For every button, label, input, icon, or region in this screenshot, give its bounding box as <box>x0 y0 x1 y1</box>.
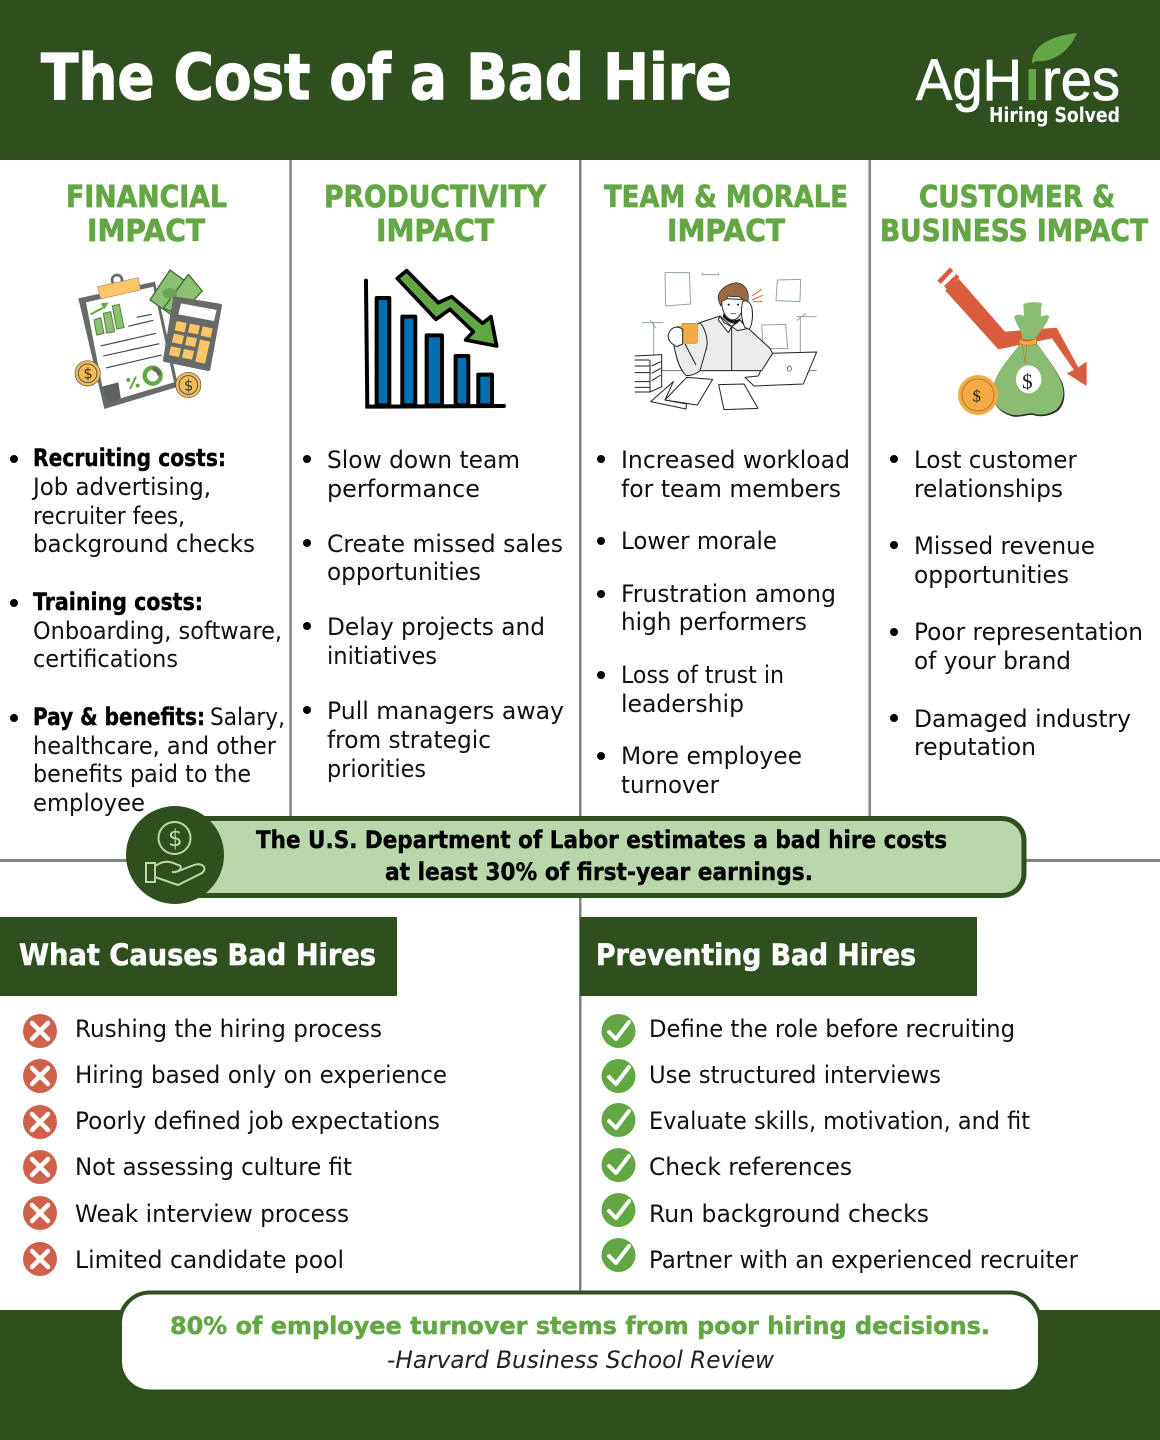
callout: turnover statistic: -Harvard Business School Review <box>387 1346 774 1374</box>
panel: productivity impact <box>303 180 564 783</box>
list: team and morale impact <box>597 446 850 799</box>
icon: hand holding dollar coin <box>126 806 224 904</box>
list: financial impact: certifications <box>33 645 178 673</box>
heading: financial impact: IMPACT <box>87 214 205 249</box>
icons: red cross marks <box>23 1014 57 1276</box>
heading: customer and business impact <box>880 180 1148 249</box>
list: productivity impact: Slow down team <box>327 446 520 474</box>
icon: money bag and falling arrow: $ <box>973 387 981 406</box>
list: causes: Limited candidate pool <box>75 1246 344 1274</box>
list: causes: Hiring based only on experience <box>75 1061 447 1089</box>
icon: clipboard, calculator and money: $ <box>184 377 193 394</box>
list: financial impact: recruiter fees, <box>33 502 185 530</box>
panel: financial impact <box>10 180 285 817</box>
callout: Department of Labor estimate: at least 30% of first-year earnings. <box>385 858 813 886</box>
logo: AgHires: AgH <box>916 48 1022 113</box>
list: customer and business impact: reputation <box>914 733 1036 761</box>
list: productivity impact: Create missed sales <box>327 530 563 558</box>
list: customer and business impact <box>890 446 1143 761</box>
list: team and morale impact: Lower morale <box>621 527 777 555</box>
heading: productivity impact <box>324 180 547 249</box>
footer band <box>0 1310 1160 1440</box>
list: financial impact: employee <box>33 789 145 817</box>
icon: stressed employee at desk <box>635 273 817 410</box>
list: financial impact <box>10 444 285 817</box>
icon: declining bar chart <box>366 271 504 407</box>
list: financial impact: healthcare, and other <box>33 732 276 760</box>
callout: turnover statistic <box>120 1292 1040 1392</box>
list: productivity impact: performance <box>327 475 480 503</box>
list: team and morale impact: leadership <box>621 690 744 718</box>
list: financial impact: benefits paid to the <box>33 760 251 788</box>
logo: AgHires: res <box>1042 48 1120 113</box>
list: prevention: Use structured interviews <box>649 1061 941 1089</box>
list: productivity impact: opportunities <box>327 558 481 586</box>
list: team and morale impact: Loss of trust in <box>621 661 784 689</box>
list: financial impact: Job advertising, <box>31 473 211 501</box>
callout: Department of Labor estimate <box>126 806 1024 904</box>
list: financial impact: background checks <box>33 530 255 558</box>
list: prevention: Partner with an experienced recruiter <box>649 1246 1078 1274</box>
list: customer and business impact: Missed revenue <box>914 532 1095 560</box>
icon: clipboard, calculator and money <box>75 270 220 409</box>
list: customer and business impact: Damaged industry <box>914 705 1131 733</box>
list: team and morale impact: high performers <box>621 608 807 636</box>
list: prevention: Evaluate skills, motivation, and fit <box>649 1107 1030 1135</box>
heading: customer and business impact: CUSTOMER & <box>919 180 1115 215</box>
heading: what causes bad hires: What Causes Bad Hires <box>19 938 376 972</box>
list: team and morale impact: Increased workload <box>621 446 850 474</box>
heading: productivity impact: IMPACT <box>376 214 494 249</box>
list: prevention: Run background checks <box>649 1200 929 1228</box>
list: customer and business impact: Lost customer <box>914 446 1077 474</box>
list: customer and business impact: of your brand <box>914 647 1071 675</box>
heading: financial impact <box>66 180 227 249</box>
heading: financial impact: FINANCIAL <box>66 180 227 215</box>
list: team and morale impact: turnover <box>621 771 719 799</box>
heading: what causes bad hires <box>0 917 397 996</box>
list: productivity impact: from strategic <box>327 726 491 754</box>
list: customer and business impact: Poor representation <box>914 618 1143 646</box>
list: financial impact: Recruiting costs: <box>33 444 226 472</box>
panel: team and morale impact <box>597 180 850 799</box>
list: customer and business impact: relationships <box>914 475 1063 503</box>
logo: AgHires <box>916 33 1120 127</box>
list: financial impact: Salary, <box>210 703 285 731</box>
header band <box>0 0 1160 160</box>
list: team and morale impact: Frustration among <box>621 580 836 608</box>
list: causes: Rushing the hiring process <box>75 1015 382 1043</box>
heading: team and morale impact: IMPACT <box>667 214 785 249</box>
icon: clipboard, calculator and money: $ <box>83 366 93 383</box>
callout: turnover statistic: 80% of employee turnover stems from poor hiring decisions. <box>170 1312 990 1340</box>
list: prevention: Check references <box>649 1153 852 1181</box>
list: causes <box>75 1015 447 1274</box>
callout: Department of Labor estimate: The U.S. Department of Labor estimates a bad hire costs <box>256 826 947 854</box>
logo: AgHires: Hiring Solved <box>989 103 1120 127</box>
icon: hand holding dollar coin: $ <box>168 826 183 852</box>
list: prevention: Define the role before recruiting <box>649 1015 1015 1043</box>
icon: money bag and falling arrow <box>937 267 1087 417</box>
list: financial impact: Training costs: <box>33 588 203 616</box>
list: financial impact: Pay & benefits: <box>33 703 205 731</box>
heading: team and morale impact: TEAM & MORALE <box>604 180 848 215</box>
list: productivity impact: initiatives <box>327 642 437 670</box>
list: causes: Poorly defined job expectations <box>75 1107 440 1135</box>
list: team and morale impact: for team members <box>621 475 841 503</box>
panel: preventing bad hires <box>580 917 1078 1274</box>
panel: what causes bad hires <box>0 917 447 1276</box>
heading: productivity impact: PRODUCTIVITY <box>324 180 547 215</box>
title: The Cost of a Bad Hire <box>41 41 732 114</box>
list: productivity impact: priorities <box>327 755 426 783</box>
list: productivity impact: Delay projects and <box>327 613 545 641</box>
heading: team and morale impact <box>604 180 848 249</box>
list: team and morale impact: More employee <box>621 742 802 770</box>
list: causes: Weak interview process <box>75 1200 349 1228</box>
icon: money bag and falling arrow: $ <box>1022 369 1033 393</box>
list: financial impact: Onboarding, software, <box>33 617 282 645</box>
list: customer and business impact: opportunities <box>914 561 1069 589</box>
list: causes: Not assessing culture fit <box>75 1153 352 1181</box>
list: productivity impact: Pull managers away <box>327 697 564 725</box>
list: productivity impact <box>303 446 564 783</box>
heading: preventing bad hires: Preventing Bad Hires <box>596 938 916 972</box>
list: prevention <box>649 1015 1078 1274</box>
heading: preventing bad hires <box>580 917 977 996</box>
icons: green check marks <box>602 1014 636 1272</box>
panel: customer and business impact <box>880 180 1148 761</box>
